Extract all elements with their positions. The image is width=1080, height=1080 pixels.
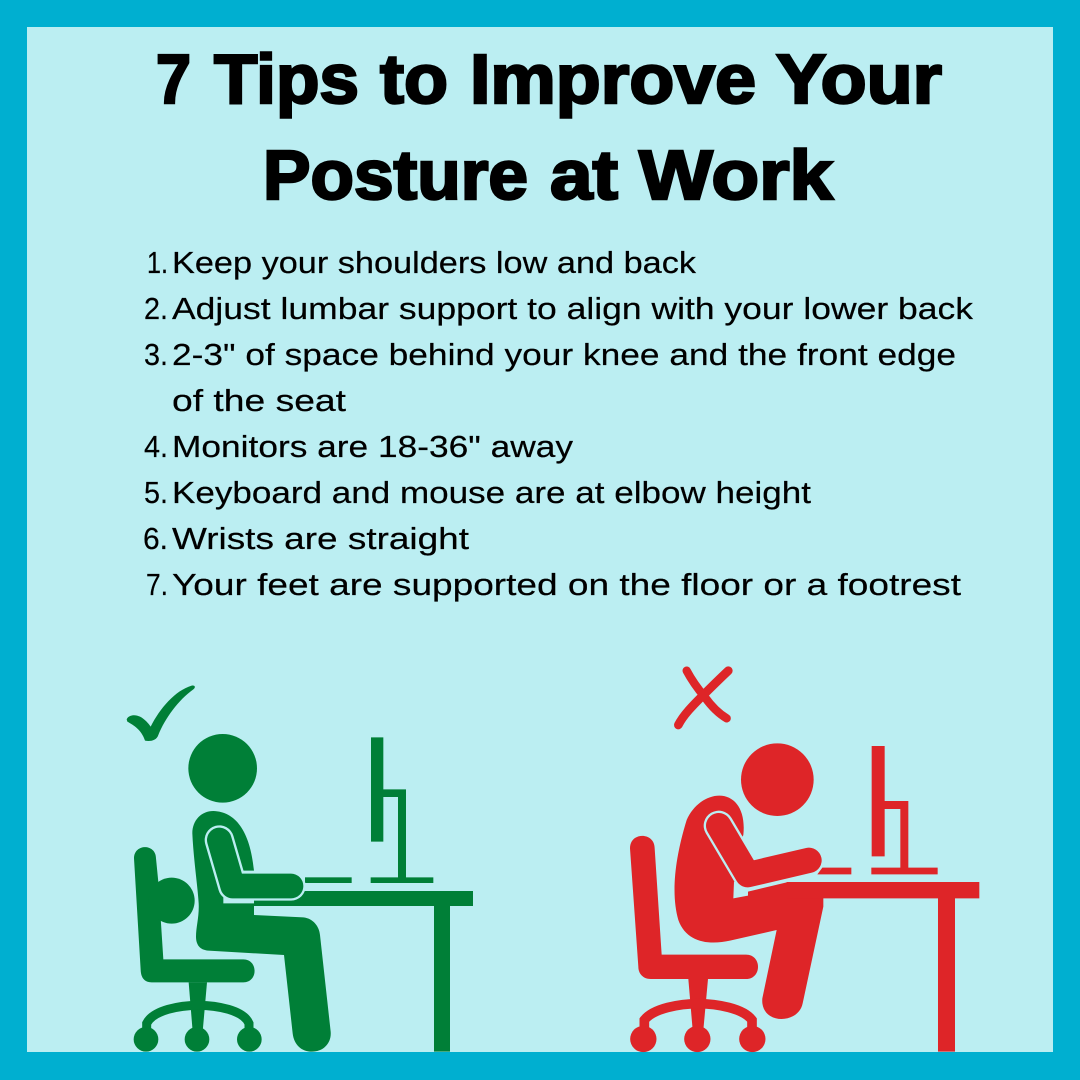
tip 3	[144, 337, 956, 418]
icon: arm	[219, 840, 291, 886]
icon: monitor	[871, 746, 938, 874]
title: 7	[156, 40, 191, 118]
tip 1: Keep your shoulders low and back	[172, 245, 697, 280]
icon: keyboard	[817, 868, 851, 874]
title: to	[380, 40, 448, 118]
tip 7: 7.	[146, 567, 168, 602]
tip 5: 5.	[144, 475, 168, 510]
title: Your	[776, 40, 942, 118]
icon: head	[741, 743, 814, 816]
tip 1: 1.	[147, 245, 168, 280]
tip 3: 2-3" of space behind your knee and the front edge	[172, 337, 956, 372]
tip 6: Wrists are straight	[172, 521, 469, 556]
tip 2: Adjust lumbar support to align with your lower back	[172, 291, 974, 326]
icon: check mark	[127, 686, 195, 741]
icon: monitor	[371, 737, 433, 883]
icon: keyboard	[305, 877, 352, 883]
tip 4: 4.	[144, 429, 168, 464]
icon: arm	[719, 826, 809, 898]
tip 4: Monitors are 18-36" away	[172, 429, 574, 464]
title: Posture	[263, 136, 528, 214]
icon: chair	[630, 836, 765, 1052]
icon: desk	[787, 882, 979, 1052]
illustration: poor posture	[630, 671, 979, 1052]
tip 6: 6.	[143, 521, 168, 556]
tip 3: of the seat	[172, 383, 346, 418]
title	[156, 40, 942, 214]
icon: cross mark	[678, 671, 728, 725]
title: Improve	[470, 40, 756, 118]
illustration: good posture	[127, 686, 473, 1052]
tip 5: Keyboard and mouse are at elbow height	[172, 475, 811, 510]
icon: desk	[254, 891, 473, 1052]
tip 3: 3.	[144, 337, 168, 372]
icon: chair	[134, 847, 262, 1052]
tip 2: 2.	[144, 291, 168, 326]
icon: head	[188, 734, 257, 803]
title: Work	[639, 136, 833, 214]
tips list	[143, 245, 974, 602]
title: at	[550, 136, 618, 214]
title: Tips	[214, 40, 359, 118]
tip 7: Your feet are supported on the floor or a footrest	[172, 567, 961, 602]
icon: torso and leg	[675, 796, 823, 1019]
icon: torso and leg	[192, 811, 331, 1052]
